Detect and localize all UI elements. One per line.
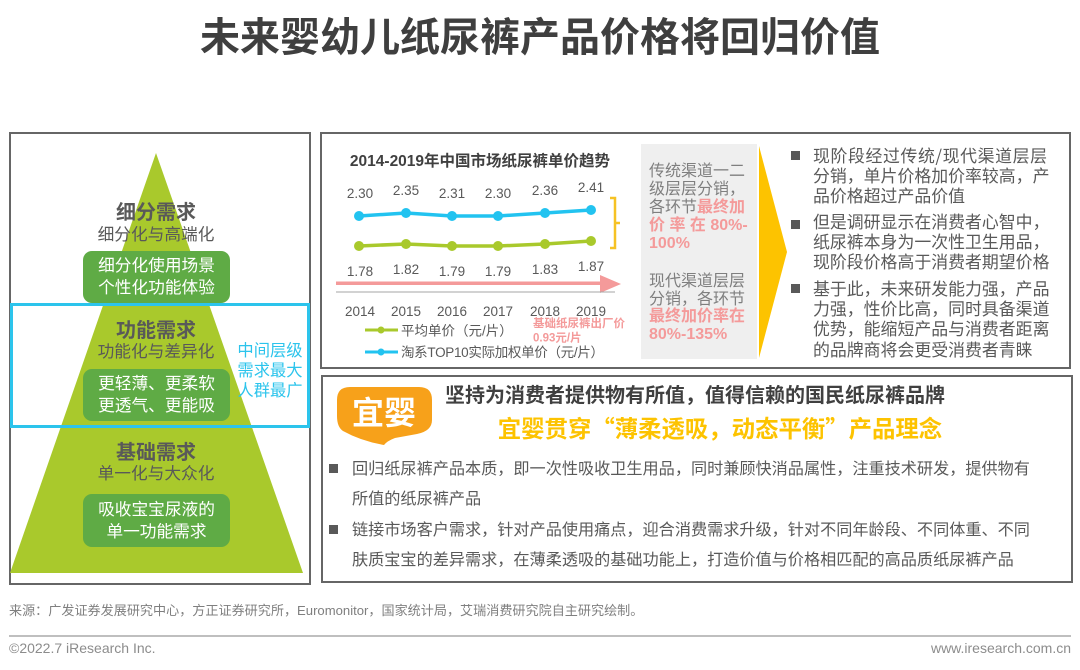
- text 1: 分销，单片价格加价率较高，产: [813, 167, 1049, 186]
- heading: brand concept: ”: [825, 410, 849, 444]
- bullet 2: [791, 220, 800, 229]
- text 3: 的品牌商将会更受消费者青睐: [813, 341, 1033, 360]
- x axis years: [345, 304, 606, 319]
- text: modern channel details: 80%-135%: [649, 326, 727, 342]
- blue series values: 2.41: [578, 180, 604, 195]
- bullet 1: [791, 151, 800, 160]
- heading: functional demand: 功能需求: [116, 320, 196, 342]
- text: channel markup details: 各环节最终加: [649, 199, 745, 216]
- text: customer needs: [352, 521, 1030, 568]
- box: segmented features: 个性化功能体验: [98, 278, 215, 297]
- x axis years: 2016: [437, 304, 467, 319]
- box: functional features: [83, 369, 230, 421]
- text: functional subtitle: 功能化与差异化: [98, 342, 214, 361]
- icon: brand logo: [337, 387, 432, 445]
- bullet 3: [791, 284, 800, 293]
- green series values: 1.83: [532, 262, 558, 277]
- blue series: [354, 205, 596, 221]
- text: modern channel details: 现代渠道层层: [649, 273, 745, 290]
- box: basic features: [83, 494, 230, 547]
- text: product essence: 回归纸尿裤产品本质，即一次性吸收卫生用品，同时兼顾快消品属性，注重技术研发，提供物有: [352, 460, 1030, 478]
- text: basic subtitle: 单一化与大众化: [98, 464, 214, 483]
- blue series values: 2.30: [485, 186, 511, 201]
- legend: 淘系TOP10实际加权单价（元/片）: [401, 344, 604, 360]
- text 3: [813, 280, 1049, 360]
- text: product essence: [352, 460, 1030, 508]
- text: channel markup details: 价 率 在 80%-: [649, 217, 748, 234]
- text: modern channel details: 分销，各环节: [649, 290, 745, 308]
- text 1: 现阶段经过传统/现代渠道层层: [813, 142, 1048, 167]
- note: factory price: [533, 316, 625, 344]
- text: channel markup details: [649, 162, 748, 252]
- chart heading: 2014-2019年中国市场纸尿裤单价趋势: [350, 153, 610, 170]
- callout: middle tier: 中间层级: [237, 342, 303, 360]
- box: functional features: 更轻薄、更柔软: [98, 374, 215, 393]
- blue series values: 2.35: [393, 183, 419, 198]
- green series values: [347, 259, 604, 279]
- heading: basic demand: 基础需求: [116, 442, 196, 464]
- heading: segmented demand: 细分需求: [116, 202, 196, 224]
- text 1: [813, 142, 1049, 206]
- heading: brand concept: “: [591, 410, 615, 444]
- text 2: 现阶段价格高于消费者期望价格: [813, 253, 1049, 272]
- text: modern channel details: [649, 272, 745, 342]
- source note: 来源：广发证券发展研究中心，方正证券研究所，Euromonitor，国家统计局，艾瑞消费研究院自主研究绘制。: [9, 603, 643, 618]
- green series: [354, 236, 596, 251]
- arrow: base price: [336, 275, 621, 293]
- text: customer needs: 肤质宝宝的差异需求，在薄柔透吸的基础功能上，打造价值与价格相匹配的高品质纸尿裤产品: [352, 550, 1014, 568]
- text: customer needs: 链接市场客户需求，针对产品使用痛点，迎合消费需求升级，针对不同年龄段、不同体重、不同: [352, 521, 1030, 539]
- green series values: 1.79: [485, 264, 511, 279]
- title: 未来婴幼儿纸尿裤产品价格将回归价值: [200, 16, 880, 60]
- panel: demand pyramid: [9, 132, 311, 585]
- green series values: 1.78: [347, 264, 373, 279]
- box: basic features: 单一功能需求: [106, 522, 207, 541]
- text 1: 品价格超过产品价值: [813, 187, 965, 206]
- text 3: 优势，能缩短产品与消费者距离: [813, 320, 1049, 339]
- green series values: 1.87: [578, 259, 604, 274]
- text 3: 力强，性价比高，同时具备渠道: [813, 300, 1049, 319]
- arrow: chevron: [759, 146, 787, 358]
- text: segmented subtitle: 细分化与高端化: [98, 225, 214, 244]
- line chart: unit price: [336, 180, 625, 360]
- text 2: 纸尿裤本身为一次性卫生用品，: [813, 233, 1049, 252]
- icon: pyramid: [10, 153, 303, 573]
- text 3: 基于此，未来研发能力强，产品: [813, 280, 1049, 299]
- icon: brand logo: 宜婴: [352, 395, 416, 431]
- x axis years: 2019: [576, 304, 606, 319]
- text 2: 但是调研显示在消费者心智中，: [813, 213, 1049, 232]
- panel: price trend and channels: [320, 132, 1071, 369]
- panel frame: [9, 132, 311, 585]
- bracket: [610, 198, 620, 248]
- callout: middle tier: 需求最大: [237, 362, 303, 380]
- box: functional features: 更透气、更能吸: [98, 396, 215, 415]
- x axis years: 2018: [530, 304, 560, 319]
- x axis years: 2015: [391, 304, 421, 319]
- box: basic features: 吸收宝宝尿液的: [98, 500, 215, 519]
- text: modern channel details: 最终加价率在: [649, 308, 745, 325]
- legend: 平均单价（元/片）: [401, 324, 513, 338]
- footer rule: [9, 635, 1071, 637]
- x axis years: 2014: [345, 304, 376, 319]
- green series values: 1.82: [393, 262, 419, 277]
- footer: website: www.iresearch.com.cn: [931, 640, 1071, 656]
- panel: brand proposition: [321, 375, 1073, 583]
- list: analysis bullets: [791, 142, 1050, 360]
- heading: brand mission: 坚持为消费者提供物有所值，值得信赖的国民纸尿裤品牌: [445, 385, 945, 407]
- blue series values: [347, 180, 604, 201]
- heading: brand concept: 宜婴贯穿 薄柔透吸，动态平衡 产品理念: [498, 410, 942, 444]
- bullet 1: [329, 464, 338, 473]
- x axis years: 2017: [483, 304, 513, 319]
- legend: [365, 324, 604, 360]
- text: channel markup details: 100%: [649, 235, 690, 252]
- text: product essence: 所值的纸尿裤产品: [352, 490, 481, 508]
- text 2: [813, 213, 1050, 272]
- axis line: [336, 291, 615, 293]
- highlight: middle tier frame: [10, 303, 310, 428]
- box: segmented features: [83, 251, 230, 303]
- panel: channel markups: [641, 144, 757, 359]
- footer: copyright: ©2022.7 iResearch Inc.: [9, 640, 156, 656]
- blue series values: 2.31: [439, 186, 465, 201]
- bullet 2: [329, 525, 338, 534]
- text: channel markup details: 传统渠道一二: [649, 163, 745, 180]
- note: factory price: 基础纸尿裤出厂价: [533, 316, 625, 330]
- callout: middle tier: 人群最广: [237, 382, 303, 400]
- text: channel markup details: 级层层分销，: [649, 181, 745, 198]
- box: segmented features: 细分化使用场景: [98, 256, 215, 275]
- blue series values: 2.36: [532, 183, 558, 198]
- callout: middle tier: [237, 342, 303, 400]
- green series values: 1.79: [439, 264, 465, 279]
- note: factory price: 0.93元/片: [533, 330, 582, 344]
- blue series values: 2.30: [347, 186, 373, 201]
